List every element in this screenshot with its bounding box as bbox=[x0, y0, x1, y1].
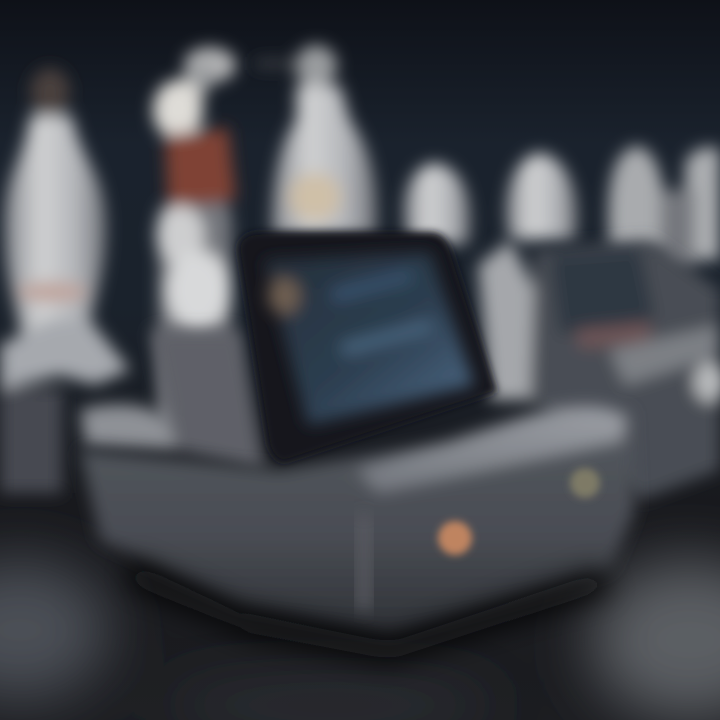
bottles: background row bbox=[404, 146, 720, 270]
device: seam bbox=[358, 515, 370, 610]
device: shadow on floor bbox=[130, 560, 610, 662]
device: main body bbox=[80, 406, 635, 635]
device: screen display bbox=[264, 252, 474, 425]
device: orange button bbox=[438, 521, 472, 555]
bottle: left figure bbox=[0, 68, 130, 493]
floor reflections bbox=[0, 560, 720, 720]
device: small beige indicator bbox=[570, 468, 600, 498]
bottle: second figure with red label bbox=[153, 47, 236, 430]
device: left side panel bbox=[80, 330, 265, 470]
device top surface bbox=[358, 406, 626, 492]
device: right background unit bbox=[478, 240, 720, 500]
bottle: third figure bbox=[255, 45, 377, 235]
device: touch screen bbox=[238, 232, 497, 462]
